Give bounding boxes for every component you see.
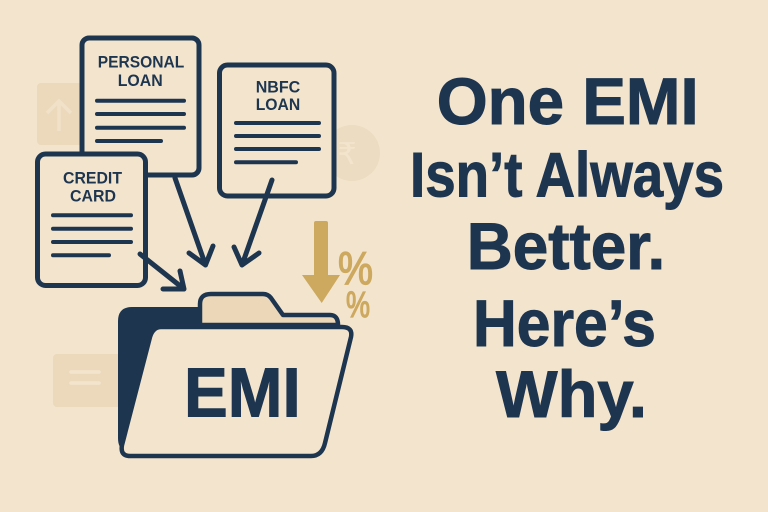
document: credit card	[38, 154, 146, 286]
icon: gold percent signs	[338, 242, 373, 325]
arrow: credit card to folder	[140, 254, 184, 289]
title: Better.	[467, 209, 665, 283]
document: personal loan: LOAN	[118, 71, 163, 90]
document: NBFC loan	[220, 65, 334, 196]
title: One EMI	[437, 64, 699, 138]
icon: gold percent signs: %	[338, 242, 373, 294]
document: NBFC loan: LOAN	[256, 95, 300, 114]
icon: gold down arrow	[302, 221, 340, 303]
title: Why.	[496, 357, 647, 431]
arrow: personal loan to folder	[175, 178, 213, 265]
document: personal loan: PERSONAL	[98, 53, 184, 72]
document: personal loan	[82, 38, 199, 175]
title	[410, 64, 724, 431]
document: credit card: CREDIT	[63, 168, 123, 187]
document: credit card: CARD	[70, 187, 116, 206]
title: Isn’t Always	[410, 141, 724, 211]
faint icon: up arrow box	[37, 83, 87, 145]
faint icon: equals box	[53, 354, 125, 407]
folder with EMI label	[118, 294, 351, 456]
title: Here’s	[473, 286, 656, 360]
document: NBFC loan: NBFC	[256, 77, 300, 96]
faint icon: rupee coin	[324, 125, 380, 181]
folder label: EMI	[184, 354, 301, 432]
folder front	[122, 327, 351, 456]
folder tab	[200, 294, 338, 325]
faint icon: rupee coin: ₹	[337, 137, 357, 172]
arrow: NBFC loan to folder	[234, 180, 272, 265]
folder back panel	[118, 307, 200, 450]
icon: gold percent signs: %	[346, 284, 370, 325]
